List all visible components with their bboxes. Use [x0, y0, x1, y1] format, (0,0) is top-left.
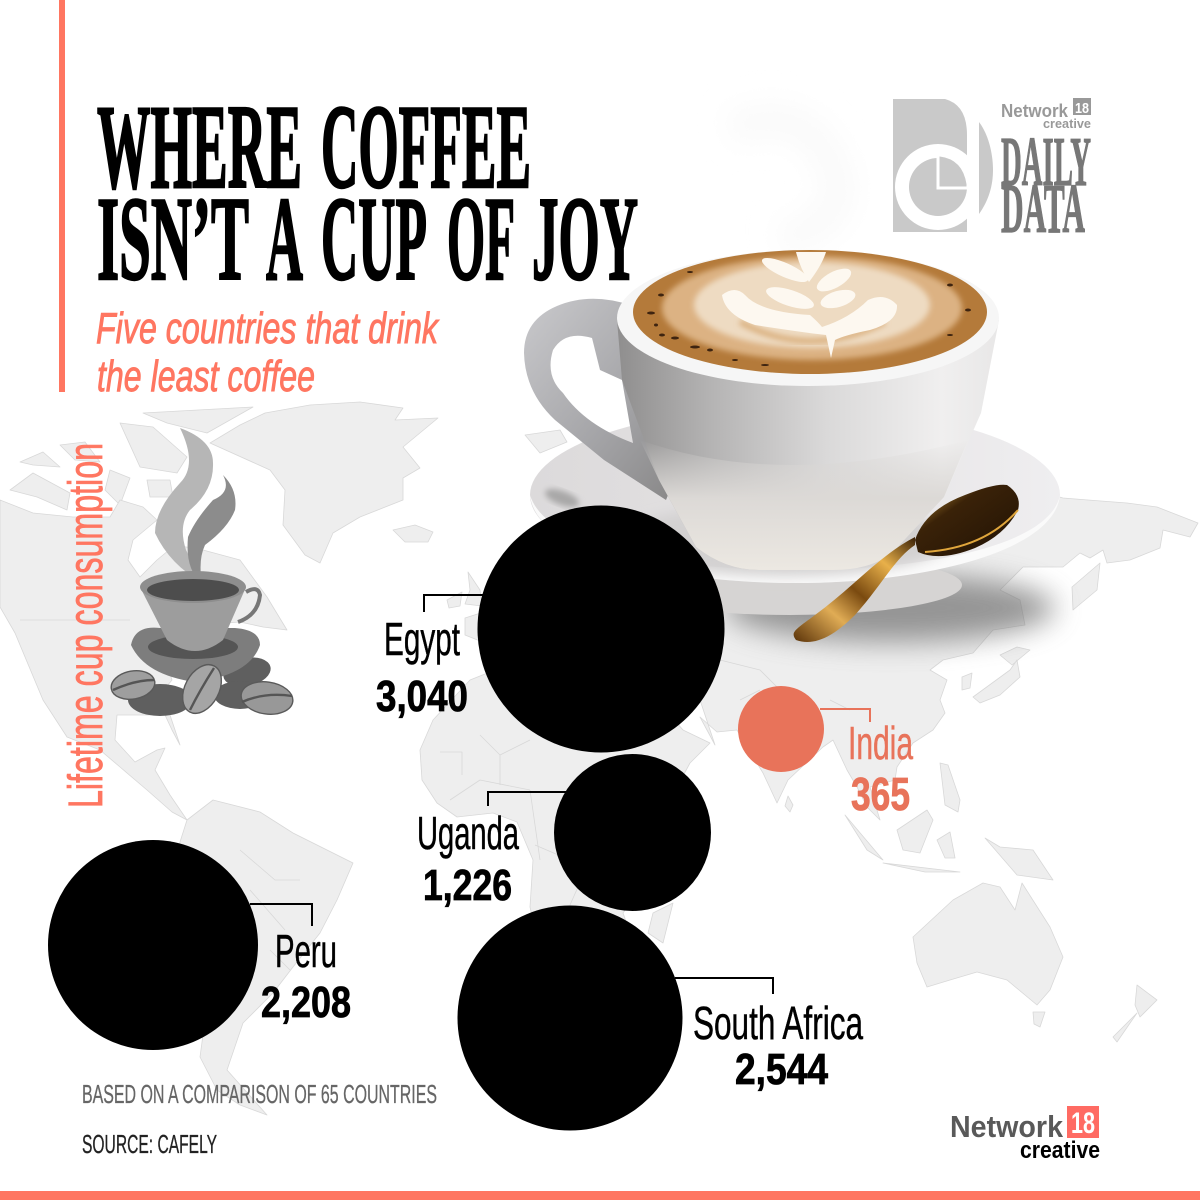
- Peru name: Peru: [275, 925, 337, 977]
- map: Australia and New Zealand: [913, 883, 1157, 1042]
- South Africa value: 2,544: [735, 1045, 828, 1094]
- South Africa name: South Africa: [693, 997, 863, 1049]
- map: Eurasia: [465, 470, 1198, 820]
- Peru value: 2,208: [261, 978, 351, 1027]
- map: Greenland: [210, 402, 438, 563]
- logo: daily data wordmark: [1001, 124, 1091, 248]
- title line 1: WHERE: [97, 80, 302, 213]
- axis label: lifetime cup consumption: Lifetime cup consumption: [60, 443, 113, 808]
- icon: beans front: [109, 658, 295, 720]
- cup body: [617, 320, 999, 570]
- icon: beans behind: [128, 653, 273, 716]
- bubble: India: [738, 686, 913, 820]
- saucer shadow: [725, 574, 1055, 642]
- Egypt value: 3,040: [376, 672, 468, 721]
- icon: saucer: [131, 628, 260, 682]
- Uganda leader line: [488, 792, 566, 806]
- title line 2: A: [266, 172, 303, 305]
- bubble: Peru: [48, 840, 351, 1050]
- map: North and Central America: [0, 500, 287, 820]
- side accent bar: [59, 0, 65, 392]
- subtitle line 1: Five countries that drink: [96, 304, 439, 353]
- title: COFFEE: [321, 80, 531, 213]
- network18 creative logo: 18: [1071, 1107, 1095, 1140]
- icon: coffee cup with beans: [109, 428, 295, 720]
- subtitle: [96, 304, 439, 401]
- South Africa leader line: [675, 978, 773, 994]
- icon: cup: [140, 587, 246, 651]
- text: DATA: [1001, 171, 1085, 248]
- footnote: comparison basis: BASED ON A COMPARISON OF 65 COUNTRIES: [82, 1079, 437, 1109]
- bubble: Uganda: [417, 754, 711, 911]
- coffee surface: [633, 250, 987, 374]
- subtitle line 2: the least coffee: [97, 352, 315, 401]
- coffee cup photo: [524, 250, 1060, 642]
- cup rim: [617, 250, 999, 386]
- Egypt name: Egypt: [384, 613, 460, 665]
- India leader line: [820, 709, 870, 722]
- map: Madagascar: [648, 903, 673, 943]
- spoon: [794, 485, 1019, 642]
- cup handle: [524, 299, 690, 500]
- logo: d mark: [893, 99, 993, 232]
- South Africa circle: [458, 906, 682, 1130]
- title: [97, 80, 638, 305]
- logo: network18 creative: [1001, 98, 1091, 131]
- world map: [0, 402, 1198, 1115]
- footnote: source: SOURCE: CAFELY: [82, 1129, 217, 1159]
- text: JOY: [532, 172, 638, 305]
- map: Africa: [420, 660, 710, 1040]
- India value: 365: [851, 768, 910, 820]
- network18 creative logo: [950, 1106, 1100, 1164]
- Uganda circle: [554, 754, 711, 911]
- network18 creative logo: Network: [950, 1109, 1064, 1144]
- map: UK, Ireland, Iceland, Svalbard: [393, 430, 567, 608]
- Egypt leader line: [424, 595, 484, 612]
- India name: India: [848, 717, 913, 769]
- icon: steam: [155, 428, 236, 583]
- Peru leader line: [250, 904, 312, 926]
- daily data logo: [893, 98, 1091, 248]
- crema speckles: [647, 271, 971, 366]
- saucer: [530, 407, 1060, 615]
- logo: network18 creative: 18: [1075, 100, 1089, 117]
- Uganda value: 1,226: [423, 861, 512, 910]
- Peru circle: [48, 840, 258, 1050]
- logo: network18 creative: creative: [1043, 116, 1091, 131]
- network18 creative logo: creative: [1020, 1137, 1100, 1164]
- title line 2: OF: [447, 172, 515, 305]
- map: South America: [165, 800, 353, 1115]
- bubble: South Africa: [458, 906, 863, 1130]
- title line 2: CUP: [321, 172, 427, 305]
- latte art: [722, 252, 897, 358]
- steam above the cup: [730, 120, 838, 240]
- map: borders: [20, 620, 850, 970]
- title line 2: ISN’T: [97, 172, 249, 305]
- bottom accent bar: [0, 1191, 1200, 1200]
- logo: network18 creative: Network: [1001, 101, 1069, 121]
- Egypt circle: [478, 506, 724, 752]
- Uganda name: Uganda: [417, 807, 519, 859]
- map: Arctic islands: [10, 407, 253, 510]
- title line 2: [97, 172, 638, 305]
- bubble: Egypt: [376, 506, 724, 752]
- India circle: [738, 686, 824, 772]
- map: Asian islands: [785, 563, 1100, 880]
